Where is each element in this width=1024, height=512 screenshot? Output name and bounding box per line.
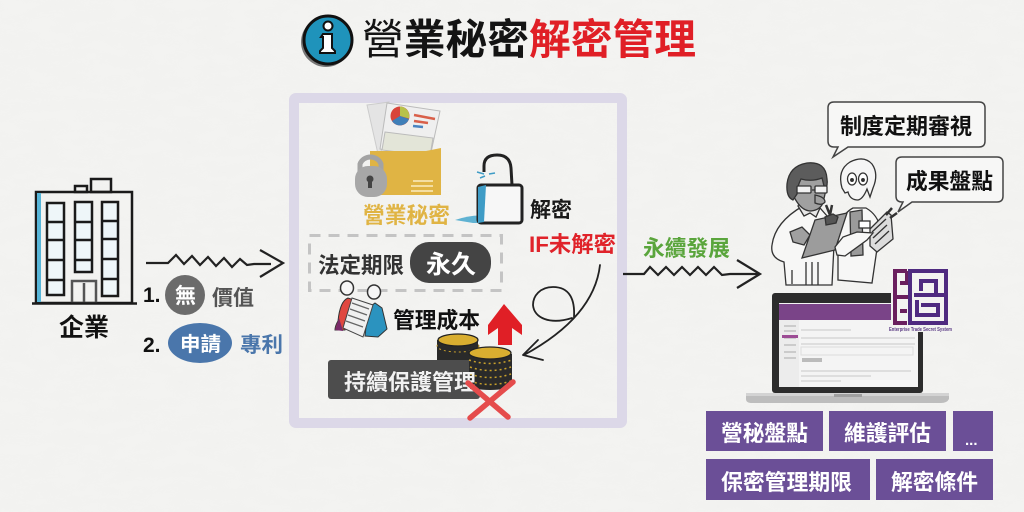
option 1: no value <box>143 275 254 315</box>
illustration: two reviewers with clipboard <box>772 159 897 285</box>
icon: two people holding document <box>335 281 387 337</box>
woman's arm <box>835 232 873 256</box>
button: confidentiality period <box>706 459 870 500</box>
option 2: apply for patent: 申請 <box>180 333 221 356</box>
label: declassify: 解密 <box>530 198 572 222</box>
label: sustainable development: 永續發展 <box>643 236 730 261</box>
title text: 營業秘密解密管理 <box>362 16 696 63</box>
speech bubble: outcome inventory: 成果盤點 <box>906 169 993 194</box>
icon: documents and locked folder <box>355 102 441 197</box>
option 2: apply for patent: 專利 <box>240 334 283 357</box>
arrow: panel to system <box>623 260 760 288</box>
laptop with system screenshot <box>746 293 949 403</box>
option 1: no value: 價值 <box>212 287 254 310</box>
ongoing protection bar background <box>328 360 480 399</box>
icon: open padlock <box>455 155 522 223</box>
woman <box>838 159 880 283</box>
button: declassification conditions <box>876 459 993 500</box>
button: confidentiality period: 保密管理期限 <box>721 470 852 495</box>
label: if not declassified: IF未解密 <box>529 232 616 257</box>
option 2: apply for patent: 2. <box>143 334 161 357</box>
icon: red cross <box>468 382 513 418</box>
button: more <box>953 411 993 451</box>
button: declassification conditions: 解密條件 <box>891 470 978 495</box>
panel: trade secret lifecycle <box>294 98 622 423</box>
label: ongoing protection management: 持續保護管理 <box>344 370 476 395</box>
arrow: looping curve <box>523 265 600 360</box>
label: trade secret: 營業秘密 <box>363 203 450 228</box>
speech bubble: outcome inventory <box>896 157 1003 212</box>
icon: coin stacks <box>437 334 512 390</box>
pill: permanent <box>410 242 491 283</box>
button: maintenance assessment <box>829 411 946 451</box>
speech bubble: periodic system review <box>828 102 985 157</box>
label: enterprise: 企業 <box>59 314 109 342</box>
held papers <box>870 208 897 252</box>
clipboard <box>802 205 847 258</box>
option 2: apply for patent <box>143 323 283 363</box>
label: management cost: 管理成本 <box>393 308 480 333</box>
option 1: no value: 無 <box>175 284 196 308</box>
label: statutory period: 法定期限 <box>318 253 404 278</box>
pill: permanent: 永久 <box>426 251 476 279</box>
speech bubble: periodic system review: 制度定期審視 <box>840 114 972 139</box>
button: secret inventory <box>706 411 823 451</box>
button: secret inventory: 營秘盤點 <box>721 421 808 446</box>
statutory period box <box>310 236 502 290</box>
title <box>301 16 696 67</box>
button: maintenance assessment: 維護評估 <box>844 421 931 446</box>
icon: information <box>301 16 352 67</box>
man <box>772 163 835 285</box>
logo: enterprise trade secret system: Enterprise Trade Secret System <box>889 327 952 333</box>
button: more: ... <box>965 432 978 449</box>
arrow: cost increase <box>488 304 522 345</box>
icon: company building <box>32 179 137 304</box>
arrow: company to panel <box>146 250 283 277</box>
logo: enterprise trade secret system <box>889 267 952 333</box>
option 1: no value: 1. <box>143 284 161 307</box>
